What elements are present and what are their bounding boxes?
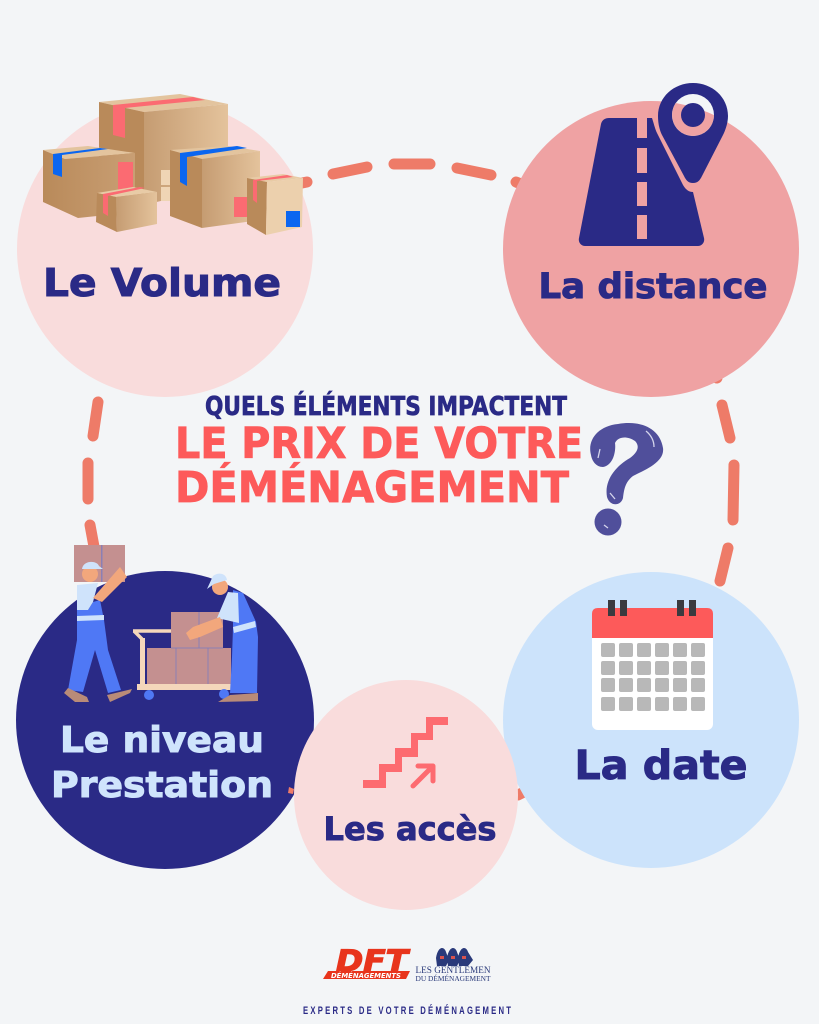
icon: cardboard boxes bbox=[43, 94, 303, 235]
title: QUELS ÉLÉMENTS IMPACTENT bbox=[205, 390, 567, 422]
icon: question mark bbox=[590, 423, 663, 536]
heading: le niveau prestation: Le niveau bbox=[60, 720, 264, 761]
logo: DFT Déménagements bbox=[323, 944, 410, 980]
tagline: EXPERTS DE VOTRE DÉMÉNAGEMENT bbox=[303, 1005, 511, 1017]
heading: les accès: Les accès bbox=[324, 810, 496, 848]
title bbox=[175, 390, 583, 513]
icon: stairs with arrow bbox=[363, 717, 448, 788]
icon: road and location pin bbox=[578, 83, 728, 246]
heading: la date: La date bbox=[574, 743, 748, 789]
mover right bbox=[230, 590, 258, 693]
logo: Les Gentlemen du Déménagement: DU DÉMÉNAGEMENT bbox=[416, 973, 491, 983]
icon: movers with boxes and trolley bbox=[64, 545, 258, 702]
icon: calendar bbox=[592, 600, 713, 730]
panel: les accès bbox=[294, 680, 518, 910]
panel: le volume bbox=[17, 94, 313, 397]
title: LE PRIX DE VOTRE bbox=[175, 419, 583, 469]
logo: DFT Déménagements: DÉMÉNAGEMENTS bbox=[331, 971, 401, 980]
logo: Les Gentlemen du Déménagement bbox=[416, 948, 491, 983]
logo: DFT Déménagements: DFT bbox=[336, 944, 410, 978]
heading: la distance: La distance bbox=[538, 267, 768, 307]
logo: Les Gentlemen du Déménagement: LES GENTLEMEN bbox=[416, 966, 491, 976]
heading: le volume: Le Volume bbox=[43, 261, 281, 305]
trolley bbox=[133, 631, 171, 639]
panel: le niveau prestation bbox=[16, 545, 314, 869]
box carried bbox=[74, 545, 125, 582]
small ring dash beside les accès bbox=[288, 787, 294, 794]
panel: le niveau prestation: Prestation bbox=[51, 765, 273, 806]
title: DÉMÉNAGEMENT bbox=[175, 462, 570, 513]
mover left bbox=[68, 600, 121, 693]
dashed ring connecting the circles bbox=[88, 164, 734, 795]
panel: la date bbox=[503, 572, 799, 868]
panel: la distance bbox=[503, 83, 799, 397]
